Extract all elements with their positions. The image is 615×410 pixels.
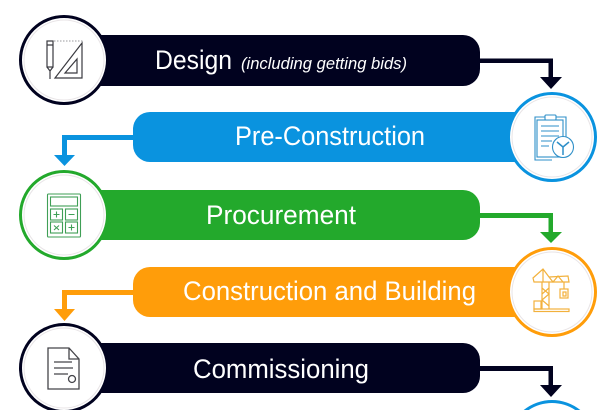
bar: design bbox=[64, 35, 480, 86]
arrow: design to pre-construction bbox=[480, 58, 562, 89]
arrow: pre-construction to procurement bbox=[54, 135, 133, 166]
step 5: commissioning bbox=[19, 323, 562, 410]
arrow: construction to commissioning bbox=[54, 290, 133, 321]
step 4: construction and building bbox=[54, 248, 596, 336]
label: pre-construction: Pre-Construction bbox=[235, 121, 425, 151]
arrow: procurement to construction bbox=[480, 213, 562, 243]
step 3: procurement bbox=[20, 172, 562, 258]
label: construction and building: Construction and Building bbox=[183, 276, 476, 306]
bar: commissioning bbox=[64, 343, 480, 393]
bar: pre-construction bbox=[133, 112, 552, 162]
circle: design bbox=[20, 16, 108, 104]
circle: commissioning bbox=[19, 323, 109, 410]
icon: document with seal bbox=[48, 348, 79, 389]
step 1: design bbox=[20, 16, 562, 104]
label: procurement: Procurement bbox=[206, 200, 356, 230]
bar: procurement bbox=[64, 190, 480, 240]
icon: tower crane bbox=[533, 269, 569, 312]
label: design: Design bbox=[155, 45, 232, 75]
circle: construction and building bbox=[508, 248, 596, 336]
circle: procurement bbox=[20, 172, 108, 258]
icon: pencil and set square bbox=[47, 41, 82, 79]
icon: calculator bbox=[48, 194, 80, 237]
next step circle: partially visible bbox=[524, 400, 580, 410]
arrow: commissioning to next step bbox=[480, 366, 562, 397]
step 2: pre-construction bbox=[54, 94, 596, 180]
circle: pre-construction bbox=[508, 94, 596, 180]
icon: clipboard and clock bbox=[535, 115, 574, 160]
bar: construction and building bbox=[133, 267, 552, 317]
label: commissioning: Commissioning bbox=[193, 354, 369, 384]
label: including getting bids: (including getting bids) bbox=[241, 54, 407, 73]
